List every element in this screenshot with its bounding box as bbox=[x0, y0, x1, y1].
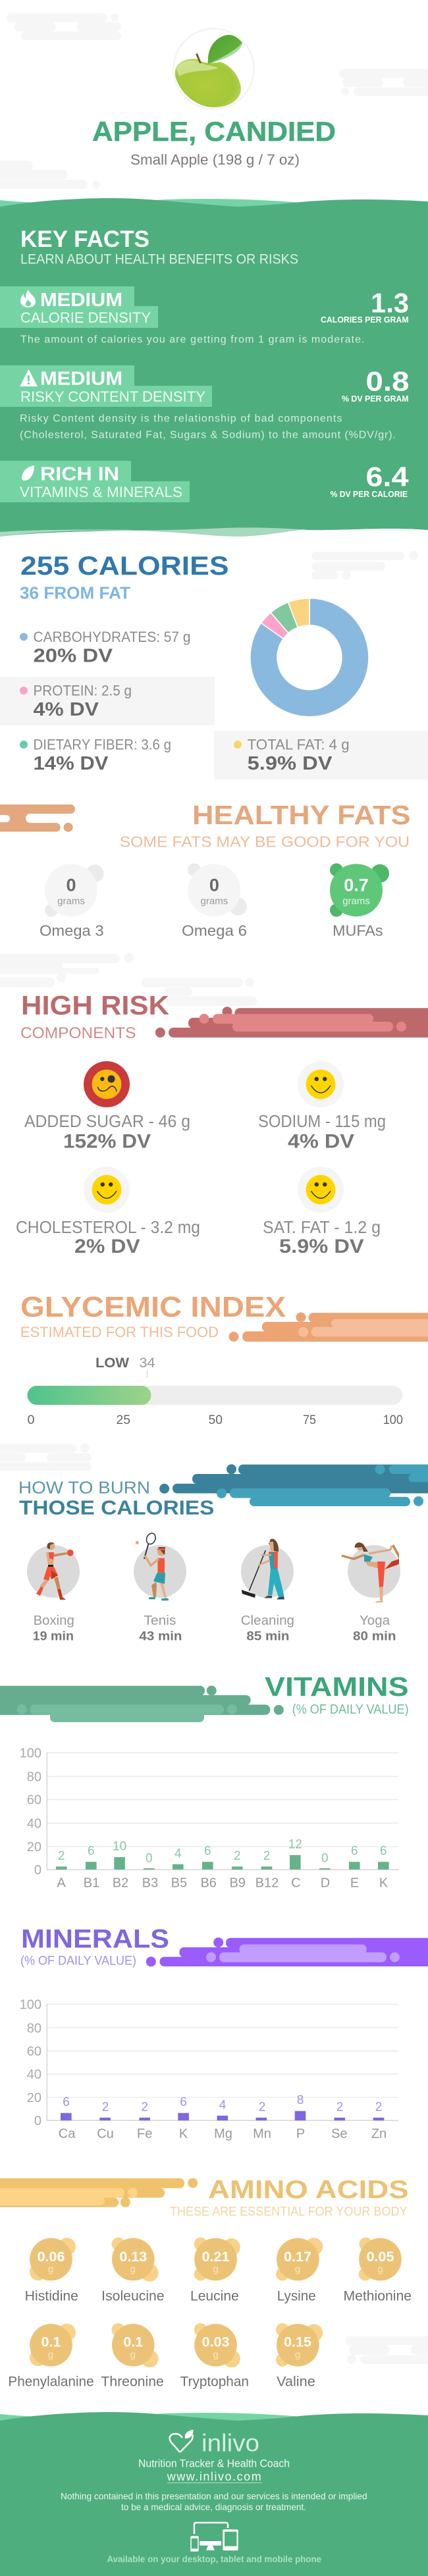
item: added sugar: ADDED SUGAR - 46 g bbox=[24, 1113, 190, 1131]
heading: key facts: KEY FACTS bbox=[20, 226, 149, 252]
bar chart: vitamins: 100 bbox=[20, 1747, 41, 1761]
bar chart: vitamins: 6 bbox=[88, 1845, 95, 1858]
item: threonine: 0.1 bbox=[123, 2334, 143, 2350]
disclaimer: Nothing contained in this presentation and our services is intended or implied bbox=[61, 2491, 367, 2502]
bar chart: vitamins bbox=[20, 1747, 398, 1891]
bar chart: vitamins: 40 bbox=[27, 1816, 41, 1831]
label: cleaning: Cleaning bbox=[241, 1614, 294, 1628]
label: calorie density: CALORIE DENSITY bbox=[20, 309, 151, 326]
item: valine: 0.15 bbox=[284, 2334, 311, 2350]
label: yoga: Yoga bbox=[360, 1614, 390, 1628]
item: lysine: g bbox=[295, 2264, 300, 2275]
panel: healthy fats bbox=[0, 800, 411, 1006]
item: threonine: g bbox=[130, 2349, 136, 2361]
bar chart: vitamins: 10 bbox=[113, 1839, 126, 1853]
bar chart: minerals: Zn bbox=[371, 2126, 387, 2141]
bar chart: minerals: Mg bbox=[214, 2126, 232, 2141]
activity: boxing bbox=[27, 1542, 80, 1600]
bar chart: minerals bbox=[20, 1997, 398, 2141]
subheading: ESTIMATED FOR THIS FOOD bbox=[20, 1324, 219, 1340]
bar chart: vitamins: 0 bbox=[321, 1852, 329, 1866]
item: isoleucine: Isoleucine bbox=[101, 2289, 165, 2304]
heading: high risk: HIGH RISK bbox=[21, 990, 169, 1020]
icon: apple bbox=[174, 29, 254, 109]
item: lysine: 0.17 bbox=[284, 2249, 311, 2265]
website link: www.inlivo.com bbox=[167, 2470, 261, 2483]
panel: calories bbox=[0, 551, 428, 779]
item: histidine: Histidine bbox=[25, 2289, 78, 2304]
heading: how to burn: HOW TO BURN bbox=[18, 1477, 150, 1497]
bar chart: vitamins: 60 bbox=[27, 1793, 41, 1808]
bar chart: vitamins: 2 bbox=[58, 1849, 65, 1863]
heading: minerals: MINERALS bbox=[21, 1925, 169, 1954]
item: methionine: Methionine bbox=[344, 2289, 412, 2304]
item: valine bbox=[276, 2323, 323, 2390]
bar chart: vitamins: 2 bbox=[263, 1849, 270, 1863]
item: omega 6: 0 bbox=[209, 876, 219, 895]
bar chart: vitamins: 20 bbox=[27, 1840, 41, 1854]
row: total fat: 5.9% DV bbox=[248, 753, 333, 774]
item: mufas: MUFAs bbox=[333, 922, 383, 939]
item: sodium bbox=[258, 1061, 386, 1152]
bar chart: vitamins: B12 bbox=[255, 1876, 279, 1891]
item: saturated fat: 5.9% DV bbox=[279, 1236, 364, 1257]
unit: CALORIES PER GRAM bbox=[321, 315, 409, 325]
bar chart: vitamins: C bbox=[291, 1876, 301, 1891]
subtitle: Small Apple (198 g / 7 oz) bbox=[130, 151, 300, 168]
value: 34: 34 bbox=[140, 1355, 155, 1371]
heading: amino acids: AMINO ACIDS bbox=[208, 2176, 409, 2204]
item: omega 6: grams bbox=[201, 896, 228, 907]
heading: those calories: THOSE CALORIES bbox=[19, 1496, 214, 1519]
panel: footer bbox=[0, 2412, 428, 2576]
disclaimer: to be a medical advice, diagnosis or treatment. bbox=[121, 2502, 306, 2512]
item: sodium: 4% DV bbox=[288, 1130, 354, 1152]
bar chart: minerals: 6 bbox=[63, 2095, 70, 2109]
row: total fat: TOTAL FAT: 4 g bbox=[248, 736, 350, 752]
row: protein: PROTEIN: 2.5 g bbox=[33, 683, 132, 699]
item: leucine bbox=[190, 2238, 240, 2304]
item: tryptophan bbox=[180, 2323, 249, 2390]
heading: vitamins: VITAMINS bbox=[265, 1671, 409, 1702]
subheading: (% OF DAILY VALUE) bbox=[20, 1954, 136, 1968]
panel: glycemic index bbox=[20, 1291, 428, 1427]
item: threonine: Threonine bbox=[101, 2374, 164, 2390]
bar chart: minerals: 2 bbox=[336, 2101, 343, 2115]
title: APPLE, CANDIED bbox=[92, 116, 336, 147]
bar chart: minerals: P bbox=[296, 2126, 305, 2141]
item: histidine: 0.06 bbox=[38, 2249, 65, 2265]
panel: key facts bbox=[0, 198, 428, 537]
label: boxing: Boxing bbox=[34, 1614, 74, 1628]
bar chart: minerals: 6 bbox=[180, 2095, 187, 2109]
icon: warning bbox=[20, 369, 38, 386]
bar chart: minerals: Cu bbox=[97, 2126, 114, 2141]
decoration: mineral bars bbox=[146, 1937, 428, 1966]
bar chart: vitamins: D bbox=[321, 1876, 330, 1891]
heading: glycemic index: GLYCEMIC INDEX bbox=[20, 1291, 286, 1323]
description: Risky Content density is the relationship of bad components bbox=[20, 413, 342, 424]
bar chart: vitamins: B9 bbox=[229, 1876, 246, 1891]
row: protein: 4% DV bbox=[33, 699, 99, 720]
label: rich in: RICH IN bbox=[40, 464, 119, 485]
bar chart: minerals: 2 bbox=[375, 2101, 382, 2115]
decoration: vitamin bars bbox=[0, 1685, 284, 1722]
subheading: SOME FATS MAY BE GOOD FOR YOU bbox=[120, 833, 410, 851]
item: lysine bbox=[276, 2238, 323, 2304]
panel: minerals bbox=[20, 1925, 428, 2141]
bar chart: vitamins: 6 bbox=[351, 1845, 358, 1858]
icon: leaf bbox=[22, 465, 34, 481]
bar chart: minerals: 100 bbox=[20, 1997, 41, 2012]
gauge scale: 25 bbox=[116, 1413, 130, 1427]
bar chart: vitamins: 4 bbox=[174, 1847, 182, 1860]
item: leucine: 0.21 bbox=[202, 2249, 229, 2265]
label: tennis: Tenis bbox=[144, 1614, 176, 1628]
bar chart: minerals: Fe bbox=[137, 2126, 152, 2141]
bar chart: minerals: Se bbox=[331, 2126, 348, 2141]
activity: cleaning bbox=[241, 1538, 294, 1600]
item: added sugar: 152% DV bbox=[63, 1130, 151, 1152]
decoration: amino bars bbox=[0, 2178, 198, 2207]
bar chart: minerals: 60 bbox=[27, 2045, 41, 2059]
bar chart: minerals: 40 bbox=[27, 2068, 41, 2082]
bar chart: minerals: K bbox=[179, 2126, 188, 2141]
bar chart: vitamins: 0 bbox=[34, 1863, 41, 1878]
row: dietary fiber: DIETARY FIBER: 3.6 g bbox=[33, 736, 171, 752]
gauge scale bbox=[28, 1413, 403, 1427]
item: tryptophan: 0.03 bbox=[202, 2334, 229, 2350]
fact: rich in vitamins and minerals bbox=[0, 461, 409, 502]
subheading: from fat: 36 FROM FAT bbox=[20, 583, 130, 602]
bar chart: minerals: 2 bbox=[259, 2101, 265, 2115]
item: histidine bbox=[25, 2238, 78, 2304]
item: mufas: grams bbox=[342, 896, 370, 907]
item: isoleucine: 0.13 bbox=[119, 2249, 147, 2265]
item: methionine bbox=[344, 2238, 412, 2304]
row: total fat bbox=[214, 731, 428, 779]
item: omega 3: grams bbox=[57, 896, 85, 907]
label: low: LOW bbox=[95, 1355, 129, 1371]
bar chart: minerals: 0 bbox=[34, 2114, 41, 2128]
item: histidine: g bbox=[48, 2264, 53, 2275]
panel: header bbox=[0, 13, 428, 189]
bar chart: minerals: 8 bbox=[297, 2093, 304, 2107]
activity: tennis bbox=[134, 1532, 186, 1600]
availability note: Available on your desktop, tablet and mobile phone bbox=[107, 2554, 321, 2564]
value: 1.3: 1.3 bbox=[371, 287, 409, 319]
bar chart: vitamins: 6 bbox=[204, 1845, 211, 1858]
description: The amount of calories you are getting from 1 gram is moderate. bbox=[20, 334, 365, 345]
item: cholesterol bbox=[16, 1167, 200, 1257]
item: saturated fat bbox=[263, 1167, 381, 1257]
row: carbohydrates: 20% DV bbox=[33, 645, 113, 666]
value: tennis minutes: 43 min bbox=[139, 1630, 182, 1644]
item: valine: g bbox=[295, 2349, 300, 2361]
item: phenylalanine: Phenylalanine bbox=[8, 2374, 94, 2390]
description: (Cholesterol, Saturated Fat, Sugars & Sodium) to the amount (%DV/gr). bbox=[20, 429, 396, 440]
unit: % DV PER CALORIE bbox=[331, 490, 408, 499]
bar chart: minerals: 2 bbox=[141, 2101, 148, 2115]
item: added sugar bbox=[24, 1061, 190, 1152]
bar chart: minerals: 80 bbox=[27, 2021, 41, 2036]
item: tryptophan: Tryptophan bbox=[180, 2374, 249, 2390]
bar chart: vitamins: 6 bbox=[380, 1845, 387, 1858]
bar chart: vitamins: B5 bbox=[171, 1876, 187, 1891]
item: phenylalanine: g bbox=[48, 2349, 53, 2361]
subheading: (% OF DAILY VALUE) bbox=[292, 1702, 409, 1717]
disclaimer bbox=[61, 2491, 367, 2512]
bar chart: vitamins: A bbox=[57, 1876, 66, 1891]
gauge bar bbox=[28, 1371, 402, 1405]
logo: inlivo bbox=[170, 2429, 259, 2457]
row: carbohydrates bbox=[20, 629, 191, 666]
label: medium: MEDIUM bbox=[40, 290, 122, 311]
item: mufas bbox=[330, 863, 389, 939]
item: cholesterol: CHOLESTEROL - 3.2 mg bbox=[16, 1219, 200, 1237]
item: tryptophan: g bbox=[213, 2349, 219, 2361]
bar chart: minerals: 4 bbox=[219, 2098, 227, 2112]
panel: amino acids bbox=[0, 2176, 428, 2390]
item: sodium: SODIUM - 115 mg bbox=[258, 1113, 386, 1131]
bar chart: minerals: Mn bbox=[253, 2126, 271, 2141]
decoration: glycemic bars bbox=[229, 1313, 428, 1342]
label: vitamins and minerals: VITAMINS & MINERALS bbox=[20, 484, 182, 500]
donut chart bbox=[250, 598, 369, 717]
unit: % DV PER GRAM bbox=[342, 394, 409, 404]
bar chart: vitamins: B6 bbox=[200, 1876, 217, 1891]
icon: devices bbox=[190, 2523, 238, 2552]
gauge scale: 75 bbox=[303, 1413, 316, 1427]
icon: flame bbox=[20, 290, 36, 307]
subheading: THESE ARE ESSENTIAL FOR YOUR BODY bbox=[170, 2205, 408, 2219]
bar chart: vitamins: 0 bbox=[146, 1852, 153, 1866]
tagline: Nutrition Tracker & Health Coach bbox=[138, 2458, 290, 2470]
value: boxing minutes: 19 min bbox=[33, 1630, 74, 1644]
bar chart: minerals: 20 bbox=[27, 2091, 41, 2105]
heading: calories: 255 CALORIES bbox=[20, 552, 229, 581]
item: omega 3: 0 bbox=[66, 876, 76, 895]
item: isoleucine: g bbox=[130, 2264, 136, 2275]
bar chart: vitamins: B3 bbox=[142, 1876, 158, 1891]
item: lysine: Lysine bbox=[277, 2289, 316, 2304]
item: omega 3: Omega 3 bbox=[40, 922, 104, 939]
row: carbohydrates: CARBOHYDRATES: 57 g bbox=[33, 629, 191, 645]
decoration: healthy fats bars bbox=[0, 804, 75, 832]
item: valine: Valine bbox=[277, 2374, 315, 2390]
value: yoga minutes: 80 min bbox=[353, 1630, 396, 1644]
bar chart: vitamins: 80 bbox=[27, 1770, 41, 1784]
decoration: high risk bars bbox=[155, 1007, 428, 1038]
value: 0.8: 0.8 bbox=[366, 365, 410, 396]
panel: burn calories bbox=[0, 1444, 428, 1644]
fact: risky content density bbox=[0, 365, 410, 440]
heading: healthy fats: HEALTHY FATS bbox=[192, 800, 411, 830]
item: methionine: g bbox=[377, 2264, 383, 2275]
subheading: components: COMPONENTS bbox=[20, 1024, 136, 1042]
panel: high risk components bbox=[16, 990, 428, 1257]
item: mufas: 0.7 bbox=[344, 876, 369, 895]
panel: vitamins bbox=[0, 1671, 409, 1891]
value: cleaning minutes: 85 min bbox=[246, 1630, 290, 1644]
bar chart: vitamins: E bbox=[350, 1876, 359, 1891]
description bbox=[20, 413, 396, 440]
row: protein bbox=[0, 677, 215, 725]
activity: yoga bbox=[342, 1542, 400, 1602]
item: omega 6: Omega 6 bbox=[182, 922, 247, 939]
item: cholesterol: 2% DV bbox=[74, 1236, 140, 1257]
bar chart: vitamins: B2 bbox=[113, 1876, 128, 1891]
gauge scale: 50 bbox=[208, 1413, 223, 1427]
item: saturated fat: SAT. FAT - 1.2 g bbox=[263, 1219, 381, 1237]
row: dietary fiber bbox=[20, 736, 171, 774]
item: phenylalanine: 0.1 bbox=[41, 2334, 61, 2350]
item: phenylalanine bbox=[8, 2324, 94, 2390]
gauge scale: 100 bbox=[383, 1413, 403, 1427]
gauge scale: 0 bbox=[28, 1413, 34, 1427]
item: omega 6 bbox=[182, 863, 247, 939]
bar chart: minerals: Ca bbox=[59, 2126, 76, 2141]
bar chart: vitamins: B1 bbox=[84, 1876, 99, 1891]
value: 6.4: 6.4 bbox=[366, 461, 409, 492]
item: omega 3 bbox=[40, 864, 104, 939]
item: methionine: 0.05 bbox=[367, 2249, 394, 2265]
item: leucine: g bbox=[213, 2264, 219, 2275]
decoration: burn bars bbox=[159, 1464, 428, 1506]
logo: inlivo: inlivo bbox=[201, 2429, 259, 2457]
item: threonine bbox=[101, 2323, 164, 2390]
label: medium: MEDIUM bbox=[40, 369, 122, 390]
bar chart: minerals: 2 bbox=[102, 2101, 109, 2115]
bar chart: vitamins: K bbox=[379, 1876, 388, 1891]
bar chart: vitamins: 2 bbox=[234, 1849, 241, 1863]
bar chart: vitamins: 12 bbox=[288, 1838, 302, 1852]
subheading: LEARN ABOUT HEALTH BENEFITS OR RISKS bbox=[20, 251, 298, 267]
fact: calorie density bbox=[0, 286, 409, 345]
item: isoleucine bbox=[101, 2238, 165, 2304]
row: dietary fiber: 14% DV bbox=[33, 753, 109, 774]
label: risky content density: RISKY CONTENT DENSITY bbox=[20, 388, 205, 405]
item: leucine: Leucine bbox=[190, 2289, 239, 2304]
